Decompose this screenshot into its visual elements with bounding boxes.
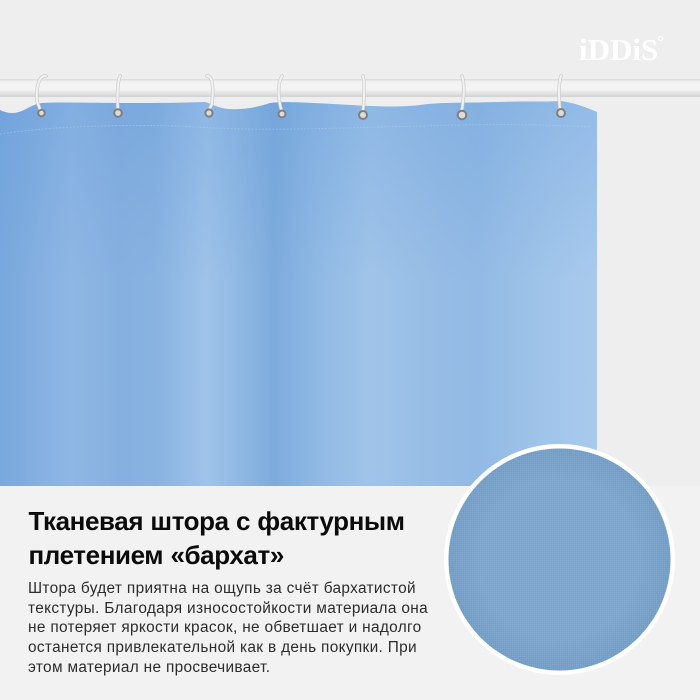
description text: текстуры. Благодаря износостойкости материала она [28, 600, 428, 617]
heading [28, 506, 405, 570]
logo: iDDiS [579, 32, 658, 67]
hem stitching [0, 125, 590, 134]
description text: Штора будет приятна на ощупь за счёт бархатистой [28, 580, 416, 597]
curtain fabric [0, 101, 597, 486]
curtain rail [0, 79, 700, 97]
description text: этом материал не просвечивает. [28, 659, 270, 676]
curtain rings and grommets [37, 76, 565, 119]
heading: плетением «бархат» [28, 540, 284, 570]
description text [28, 580, 428, 676]
fabric texture close-up circle [444, 444, 675, 675]
description text: останется привлекательной как в день покупки. При [28, 639, 417, 656]
description text: не потеряет яркости красок, не обветшает и надолго [28, 619, 422, 636]
logo registered mark [658, 36, 663, 41]
heading: Тканевая штора с фактурным [28, 506, 405, 536]
bottom text band [0, 486, 700, 700]
